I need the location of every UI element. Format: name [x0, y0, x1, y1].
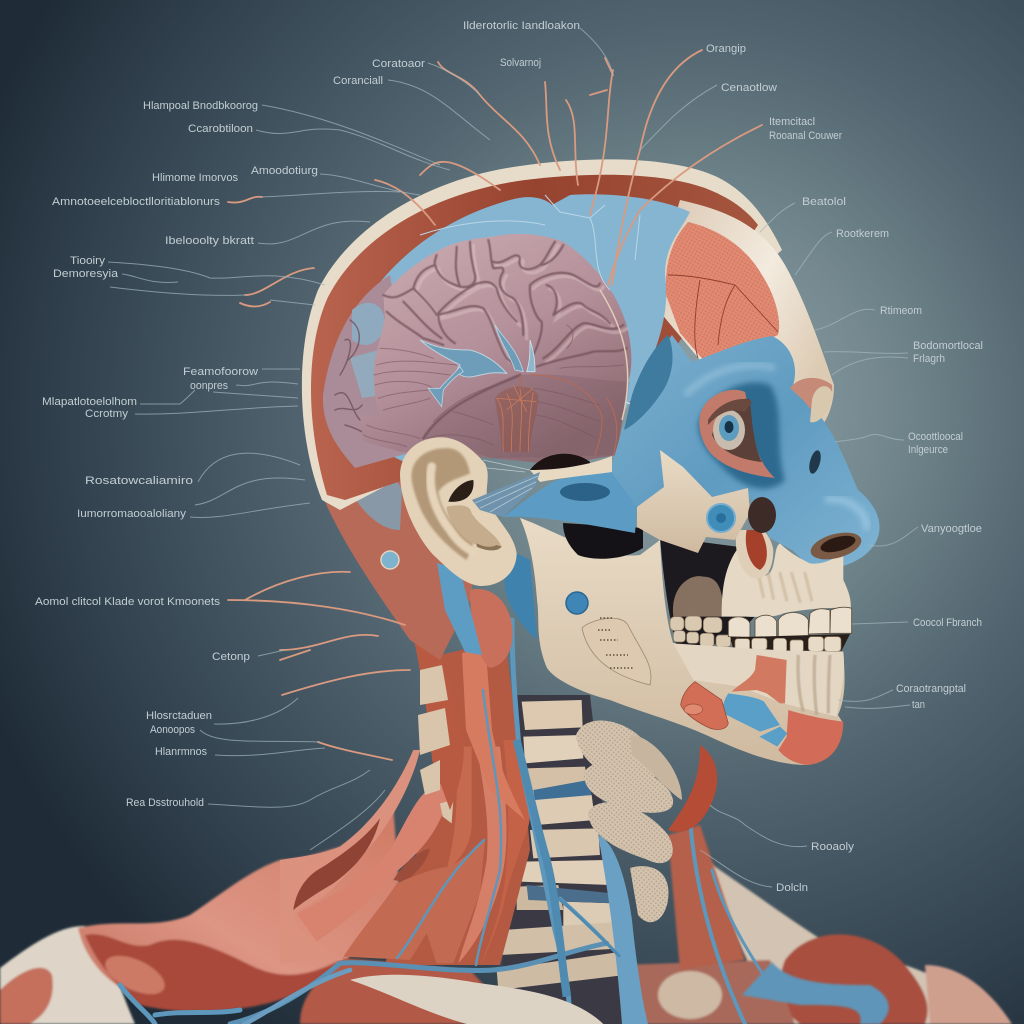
- second blue vessel: [240, 970, 350, 1024]
- iris: [719, 415, 739, 441]
- dark nasal hole: [748, 497, 776, 533]
- panel: text labels: Hlosrctaduen: [146, 710, 212, 722]
- panel: leader lines: [108, 28, 918, 887]
- panel: text labels: Rea Dsstrouhold: [126, 797, 204, 809]
- left clavicle bone: [0, 926, 135, 1024]
- panel: text labels: Ocoottloocal: [908, 431, 963, 443]
- side cream brow: [810, 386, 832, 422]
- grey temporal muscle: [332, 450, 402, 530]
- skull cream rim: [302, 159, 782, 510]
- panel: cerebrum: [360, 234, 631, 465]
- panel: text labels: Ccarobtiloon: [188, 123, 253, 135]
- panel: text labels: tan: [912, 699, 925, 711]
- antihelix ridge: [431, 467, 473, 552]
- zygomatic bone: [637, 450, 750, 553]
- blue arch underside: [503, 470, 637, 533]
- chin small blue: [759, 727, 787, 747]
- blue patch: [352, 303, 385, 345]
- lower chest muscle: [300, 958, 520, 1024]
- strand A: [447, 747, 472, 870]
- nose highlight: [825, 499, 867, 530]
- cheek blue button: [707, 504, 735, 532]
- front upper teeth: [728, 607, 852, 639]
- chin pillars: [673, 643, 844, 717]
- bottom vessels and collar bone: [230, 740, 620, 1024]
- front lower teeth: [735, 637, 841, 653]
- mandible blue button: [566, 592, 588, 614]
- panel: text labels: Mlapatlotoelolhom: [42, 396, 137, 408]
- panel: text labels: oonpres: [190, 380, 228, 392]
- spine dark backdrop: [500, 695, 625, 1024]
- outer ear: [400, 437, 517, 586]
- lobe shadow: [477, 543, 502, 550]
- panel: text labels: Frlagrh: [913, 353, 945, 365]
- nerve crossing eye: [625, 402, 692, 422]
- right far muscle: [925, 965, 1012, 1024]
- main blue vessel: [230, 943, 607, 1024]
- upper vertebral processes: [418, 665, 450, 795]
- left chest muscle: [0, 968, 53, 1024]
- panel: head back muscle: [320, 440, 537, 668]
- panel: text labels: Vanyoogtloe: [921, 523, 982, 535]
- right labels: Beatolol: [802, 196, 846, 208]
- dark cavity below brain: [530, 454, 590, 470]
- panel: text labels: Rooaoly: [811, 841, 855, 853]
- fissure blue vessels: [420, 325, 535, 407]
- chin lower red: [778, 710, 843, 765]
- blue strap: [437, 563, 482, 655]
- panel: text labels: Ibelooolty bkratt: [165, 235, 254, 247]
- panel: text labels: [35, 20, 983, 894]
- panel: zygomatic arch: [472, 456, 637, 533]
- central lower tissue: [620, 960, 795, 1024]
- panel: text labels: Coraotrangptal: [896, 683, 966, 695]
- fan fibres: [472, 472, 540, 517]
- jaw oval inner: [684, 704, 703, 715]
- throat muscle: [668, 745, 717, 832]
- mouth and teeth: [660, 530, 852, 765]
- cranial suture lines: [420, 195, 640, 290]
- concha: [447, 505, 502, 548]
- panel: text labels: Bodomortlocal: [913, 340, 983, 352]
- neck muscle backing mass: [385, 640, 530, 965]
- panel: red forehead patch: [666, 222, 779, 363]
- panel: text labels: Iumorromaooaloliany: [77, 508, 187, 520]
- panel: text labels: Dolcln: [776, 882, 808, 894]
- panel: text labels: Rosatowcaliamiro: [85, 475, 193, 487]
- chin blue: [723, 693, 780, 732]
- blue patch lower: [350, 350, 382, 398]
- panel: blue face mask: [608, 335, 880, 568]
- right neck tissue strand: [668, 825, 745, 970]
- sulci: [383, 240, 627, 438]
- vertebrae column: [497, 700, 625, 990]
- panel: text labels: Coranciall: [333, 75, 383, 87]
- panel: text labels: Ccrotmy: [85, 408, 129, 420]
- panel: outer grey brain lobe: [323, 275, 420, 468]
- panel: neck anatomy: [120, 597, 780, 1024]
- skull inner red lining: [311, 175, 758, 500]
- panel: top nerves: [228, 50, 762, 760]
- eyeball: [713, 410, 745, 450]
- panel: ear: [400, 437, 517, 586]
- panel: text labels: Inlgeurce: [908, 444, 948, 456]
- mid strand and muscle above: [462, 652, 525, 820]
- panel: text labels: Itemcitacl: [769, 116, 815, 128]
- panel: text labels: Aonoopos: [150, 724, 195, 736]
- lower lobe shade: [423, 374, 630, 458]
- blue vessels in neck: [120, 620, 780, 1024]
- cream process between straps: [440, 800, 453, 823]
- trapezius muscle sheet: [78, 803, 400, 1001]
- panel: text labels: Orangip: [706, 43, 746, 55]
- panel: text labels: Feamofoorow: [183, 366, 258, 378]
- deep blue muscle: [503, 547, 537, 640]
- panel: text labels: Rooanal Couwer: [769, 130, 842, 142]
- rear teeth: [670, 616, 731, 647]
- panel: jaw and cheek bone: [520, 450, 864, 765]
- panel: eye: [699, 390, 775, 478]
- sulci highlights: [417, 245, 627, 362]
- mandible imprint with dots: [582, 618, 651, 685]
- blue temple shadow: [624, 335, 673, 430]
- dark bite gap: [731, 634, 850, 651]
- right clavicle blue vessel: [742, 962, 889, 1024]
- panel: text labels: Solvarnoj: [500, 57, 541, 69]
- hollow second: [393, 848, 430, 882]
- deltoid muscle oval: [100, 948, 170, 1002]
- mandibular notch: [563, 523, 643, 559]
- throat vessel: [598, 835, 648, 1024]
- right shoulder muscles: [780, 934, 928, 1024]
- fine fold lines: [363, 325, 623, 447]
- brow highlight: [685, 365, 775, 395]
- collar bone: [350, 975, 603, 1024]
- panel: text labels: Tiooiry: [70, 255, 106, 267]
- right shoulder bone: [705, 860, 1010, 1024]
- panel: text labels: Rootkerem: [836, 228, 889, 240]
- dark mouth: [660, 537, 773, 647]
- maxilla ridges: [758, 573, 812, 602]
- eye socket dark: [712, 399, 762, 462]
- nostril side opening: [807, 449, 823, 475]
- cranial blue layer: [340, 194, 690, 470]
- strap muscles lower neck: [280, 740, 530, 967]
- panel: text labels: Cetonp: [212, 651, 250, 663]
- top labels: Ilderotorlic Iandloakon: [463, 20, 580, 32]
- pupil: [724, 421, 734, 433]
- nostril hole: [819, 533, 857, 555]
- upper lid: [708, 399, 752, 425]
- ramus and mandible: [520, 518, 845, 765]
- lower right ribs: [658, 971, 722, 1019]
- red muscle upper: [732, 655, 787, 703]
- small blue button neck: [381, 551, 399, 569]
- spine blue vessel: [517, 740, 567, 997]
- main brain shape: [360, 234, 631, 465]
- second strap: [297, 782, 453, 942]
- shoulder muscle shadow: [85, 934, 345, 1012]
- cream arch: [530, 456, 612, 482]
- hollow in muscle band: [293, 818, 380, 910]
- trachea rope rings: [576, 721, 682, 922]
- strand B: [458, 747, 507, 963]
- panel: shoulders and chest: [0, 803, 1012, 1024]
- fibres: [475, 460, 538, 512]
- basal nerve bundle: [495, 375, 617, 455]
- panel: text labels: Coratoaor: [372, 58, 425, 70]
- nasal muscle curl: [736, 530, 773, 578]
- crossing blue vessel: [558, 898, 620, 957]
- nostril rim: [808, 528, 864, 564]
- panel: text labels: Amoodotiurg: [251, 165, 318, 177]
- ear canal: [448, 480, 474, 502]
- panel: text labels: Hlanrmnos: [155, 746, 207, 758]
- panel: text labels: Cenaotlow: [721, 82, 777, 94]
- salmon neck muscle lobe: [470, 589, 513, 668]
- maxilla: [722, 543, 851, 617]
- eye muscle ring: [699, 390, 775, 478]
- strand C: [480, 740, 530, 967]
- cream strand along brain edge: [600, 290, 628, 420]
- third strap: [343, 840, 485, 963]
- panel: text labels: Demoresyia: [53, 268, 119, 280]
- left labels: Hlampoal Bnodbkoorog: [143, 100, 258, 112]
- panel: text labels: Amnotoeelcebloctlloritiablonurs: [52, 196, 221, 208]
- palate hump: [673, 576, 723, 617]
- forehead bone: [650, 200, 834, 435]
- first muscle band: [280, 750, 420, 963]
- panel: text labels: Hlimome Imorvos: [152, 172, 238, 184]
- large upper muscle column: [403, 597, 464, 810]
- orbit shadow: [698, 382, 785, 489]
- dark arch opening: [560, 483, 610, 501]
- panel: text labels: Aomol clitcol Klade vorot Kmoonets: [35, 596, 221, 608]
- nose bridge bone strip: [790, 378, 832, 412]
- panel: text labels: Coocol Fbranch: [913, 617, 982, 629]
- panel: text labels: Rtimeom: [880, 305, 922, 317]
- jaw red oval: [681, 682, 728, 730]
- ear hollow: [411, 448, 473, 560]
